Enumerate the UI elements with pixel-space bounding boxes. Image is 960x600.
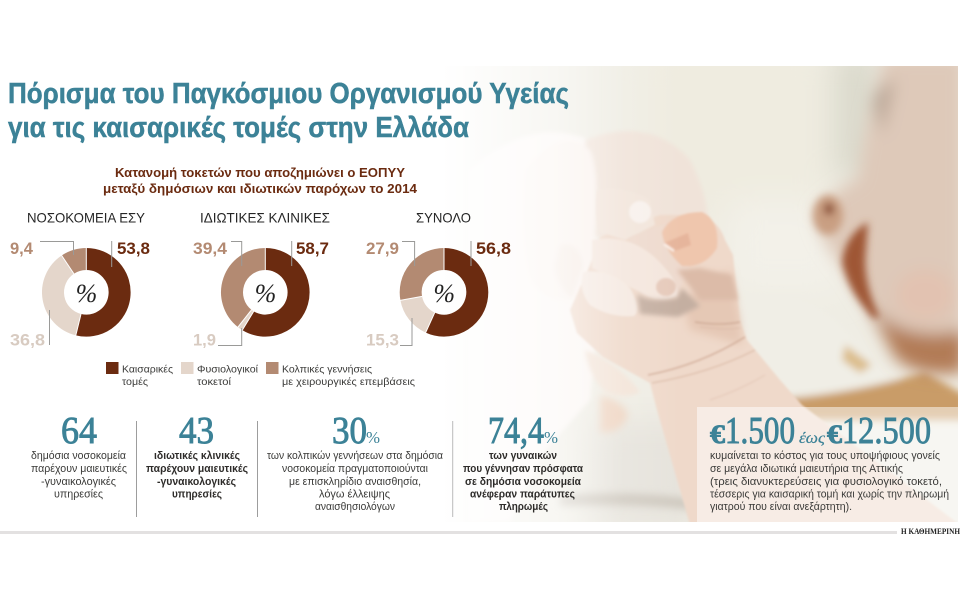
stat: 43 private clinics: [146, 410, 248, 500]
donut chart: total: ΣΥΝΟΛΟ: [416, 210, 471, 226]
title: [8, 78, 569, 144]
donut chart: private clinics: 39,4: [193, 240, 228, 258]
stat: 64 public hospitals: 64: [61, 410, 97, 452]
stat: 74,4% irregular payments: ανέφεραν παράτυπες: [470, 488, 575, 500]
stat: 64 public hospitals: παρέχουν μαιευτικές: [31, 463, 127, 475]
donut chart: private clinics: %: [255, 279, 276, 308]
stat: 74,4% irregular payments: σε δημόσια νοσοκομεία: [465, 476, 581, 488]
donut chart: public hospitals: ΝΟΣΟΚΟΜΕΙΑ ΕΣΥ: [27, 210, 146, 226]
legend: τοκετοί: [197, 376, 232, 388]
subtitle: [103, 166, 417, 196]
donut chart: total: 27,9: [366, 240, 399, 258]
adult hand: [565, 134, 705, 418]
stat: 43 private clinics: παρέχουν μαιευτικές: [146, 463, 248, 475]
stat: 43 private clinics: ιδιωτικές κλινικές: [154, 450, 240, 462]
cost text: (τρεις διανυκτερεύσεις για φυσιολογικό τοκετό,: [710, 476, 942, 488]
baby hand: [570, 189, 960, 525]
cost text: σε μεγάλα ιδιωτικά μαιευτήρια της Αττικής: [710, 463, 903, 475]
stat: 30% epidural: %: [366, 428, 380, 447]
stat: 64 public hospitals: [31, 410, 127, 500]
stat: 74,4% irregular payments: %: [544, 428, 558, 447]
donut chart: public hospitals: 36,8: [10, 332, 45, 350]
donut chart: public hospitals: [10, 210, 150, 350]
cost text: γιατρού που είναι ανεξάρτητη).: [710, 501, 852, 513]
legend: Φυσιολογικοί: [197, 364, 259, 376]
legend: Καισαρικές: [122, 364, 173, 376]
donut chart: private clinics: ΙΔΙΩΤΙΚΕΣ ΚΛΙΝΙΚΕΣ: [200, 210, 330, 226]
legend: με χειρουργικές επεμβάσεις: [282, 376, 415, 388]
donut chart: public hospitals: %: [76, 279, 97, 308]
lower cloth: [560, 344, 958, 511]
cost headline: 1.500: [725, 410, 795, 452]
title: για τις καισαρικές τομές στην Ελλάδα: [8, 112, 469, 144]
title: Πόρισμα του Παγκόσμιου Οργανισμού Υγείας: [8, 78, 569, 110]
stat: 43 private clinics: 43: [179, 410, 214, 452]
stat: 30% epidural: [267, 410, 444, 513]
baby face: [815, 55, 960, 374]
stat: 64 public hospitals: υπηρεσίες: [54, 488, 103, 500]
stat: 43 private clinics: υπηρεσίες: [172, 488, 222, 500]
background photo: baby hand holding adult finger: [518, 66, 958, 522]
stat: 74,4% irregular payments: [463, 410, 583, 513]
footer bar and credit: [0, 526, 960, 536]
donut chart: total: 56,8: [476, 240, 511, 258]
stat: 74,4% irregular payments: 74,4: [488, 410, 544, 452]
stat: 30% epidural: με επισκληρίδιο αναισθησία,: [289, 476, 421, 488]
stat: 64 public hospitals: -γυναικολογικές: [41, 476, 116, 488]
donut chart: public hospitals: 9,4: [10, 240, 34, 258]
stat: 30% epidural: 30: [332, 410, 367, 452]
stat: 30% epidural: λόγω έλλειψης: [319, 488, 390, 500]
donut chart: total: %: [433, 279, 455, 308]
stat: 30% epidural: νοσοκομεία πραγματοποιούνται: [282, 463, 429, 475]
cost headline: €: [710, 420, 725, 449]
cost text: τέσσερις για καισαρική τομή και χωρίς την πληρωμή: [710, 488, 949, 500]
legend: τομές: [122, 376, 148, 388]
stat: 74,4% irregular payments: πληρωμές: [499, 501, 548, 513]
cost headline: €: [827, 420, 842, 449]
donut chart: private clinics: 1,9: [193, 332, 216, 350]
cost text: κυμαίνεται το κόστος για τους υποψήφιους γονείς: [710, 450, 940, 462]
cost text: [710, 450, 949, 513]
donut chart: private clinics: [193, 210, 330, 350]
cost headline: [710, 410, 931, 452]
stat: 30% epidural: αναισθησιολόγων: [315, 501, 395, 513]
stat: 64 public hospitals: δημόσια νοσοκομεία: [31, 450, 127, 462]
stat: 30% epidural: των κολπικών γεννήσεων στα δημόσια: [267, 450, 444, 462]
stat: 74,4% irregular payments: που γέννησαν πρόσφατα: [463, 463, 583, 475]
subtitle: μεταξύ δημόσιων και ιδιωτικών παρόχων το 2014: [103, 182, 417, 196]
legend: [106, 362, 415, 388]
panel: cost callout: [697, 407, 958, 522]
donut chart: public hospitals: 53,8: [117, 240, 150, 258]
donut chart: private clinics: 58,7: [296, 240, 329, 258]
donut chart: total: 15,3: [366, 332, 399, 350]
legend: Κολπικές γεννήσεις: [282, 364, 372, 376]
stat: 74,4% irregular payments: των γυναικών: [489, 450, 557, 462]
donut chart: total: [366, 210, 511, 350]
cost headline: έως: [799, 430, 826, 447]
cost headline: 12.500: [842, 410, 931, 452]
subtitle: Κατανομή τοκετών που αποζημιώνει ο ΕΟΠΥΥ: [115, 166, 406, 180]
stat: 43 private clinics: -γυναικολογικές: [157, 476, 236, 488]
